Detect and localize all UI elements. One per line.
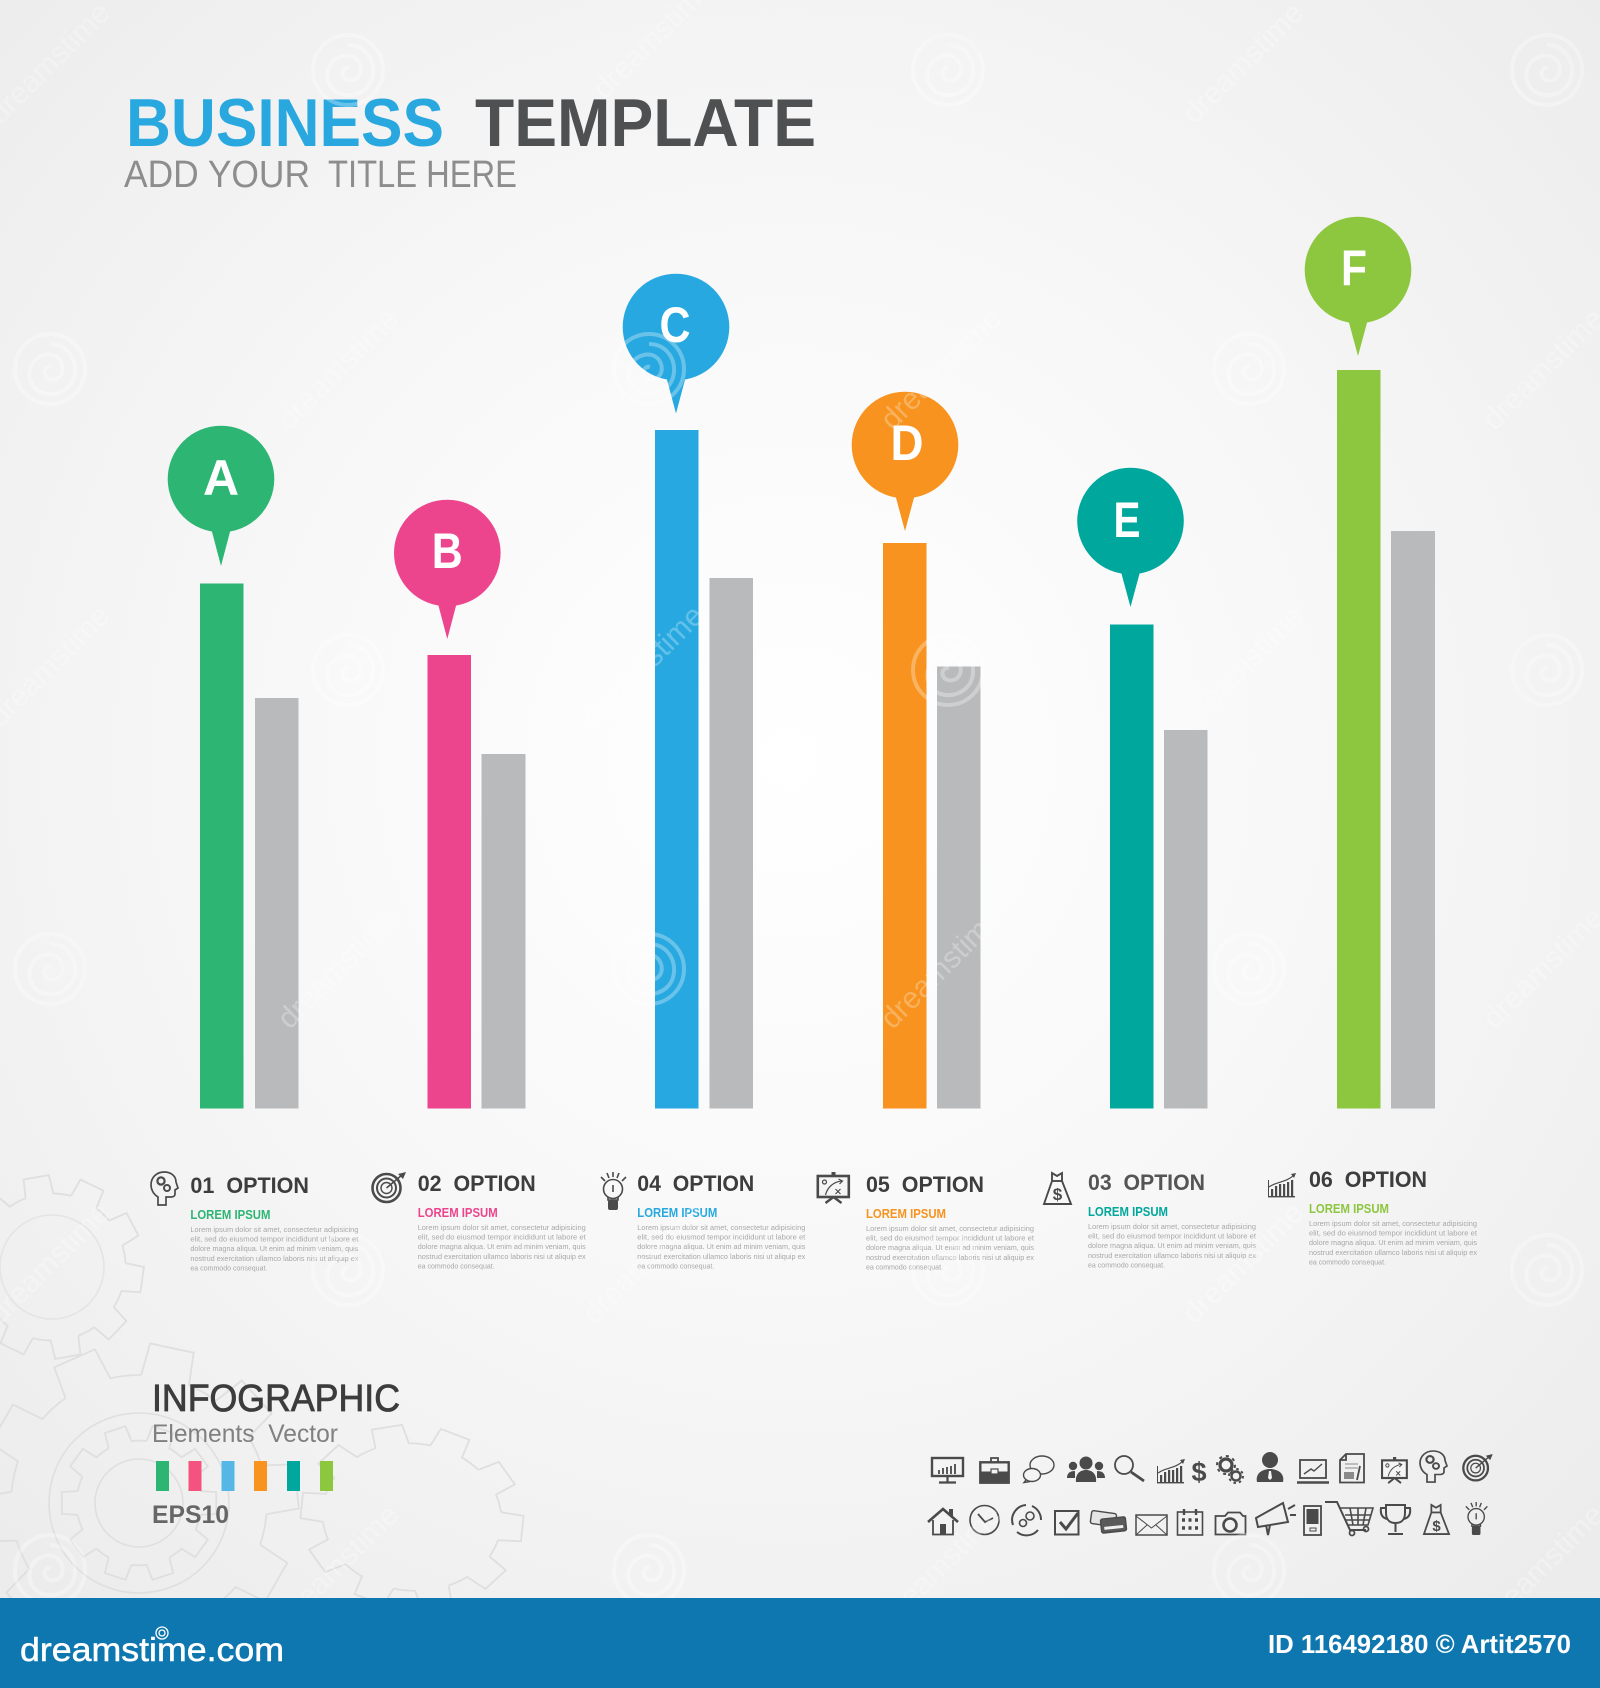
icon: camera: [1216, 1512, 1246, 1534]
option 03 text: dolore magna aliqua. Ut enim ad minim veniam, quis: [1088, 1241, 1256, 1250]
option 02 text: LOREM IPSUM: [418, 1205, 498, 1220]
option 04 text: elit, sed do eiusmod tempor incididunt ut labore et: [637, 1233, 806, 1242]
icon: light bulb: [1466, 1502, 1487, 1535]
icon: light bulb: [601, 1172, 626, 1210]
option 06 text: LOREM IPSUM: [1309, 1201, 1389, 1216]
panel: option 06: [1268, 1167, 1478, 1266]
panel: infographic label: [152, 1378, 400, 1529]
icon: trophy: [1381, 1505, 1410, 1534]
panel: option 05: [818, 1172, 1035, 1271]
icon: head: [1420, 1451, 1447, 1482]
panel: option 02: [372, 1171, 587, 1270]
option 03 text: Lorem ipsum dolor sit amet, consectetur adipisicing: [1088, 1222, 1256, 1231]
option 04 text: ea commodo consequat.: [637, 1261, 714, 1270]
icon: envelope: [1136, 1515, 1167, 1535]
option 06 text: Lorem ipsum dolor sit amet, consectetur adipisicing: [1309, 1219, 1477, 1228]
bar group C: C: [660, 297, 690, 353]
bar group D: [852, 392, 980, 1108]
text: dreamstime: [271, 1498, 405, 1632]
icon: magnifier: [1115, 1456, 1144, 1481]
icon: board: [1382, 1457, 1407, 1483]
option 06 text: elit, sed do eiusmod tempor incididunt ut labore et: [1309, 1229, 1478, 1238]
icon: shopping cart: [1325, 1502, 1373, 1536]
option 06 text: nostrud exercitation ullamco laboris nisi ut aliquip ex: [1309, 1248, 1477, 1257]
option 04 text: Lorem ipsum dolor sit amet, consectetur adipisicing: [637, 1223, 805, 1232]
option 02 text: ea commodo consequat.: [418, 1261, 495, 1270]
option 03 text: 03 OPTION: [1088, 1170, 1205, 1195]
option 05 text: LOREM IPSUM: [866, 1206, 946, 1221]
icon: person: [1257, 1452, 1283, 1482]
option 05 text: Lorem ipsum dolor sit amet, consectetur adipisicing: [866, 1224, 1034, 1233]
option 05 text: ea commodo consequat.: [866, 1262, 943, 1271]
icon: presentation board: [818, 1172, 849, 1203]
icon: megaphone: [1256, 1503, 1296, 1535]
title: [126, 85, 816, 161]
text: eps10: EPS10: [152, 1501, 229, 1529]
footer image id: ID 116492180 © Artit2570: [1268, 1629, 1571, 1659]
option 01 text: dolore magna aliqua. Ut enim ad minim veniam, quis: [190, 1244, 359, 1253]
option 05 text: [866, 1172, 1035, 1271]
icon: calendar: [1178, 1509, 1202, 1535]
option 05 text: dolore magna aliqua. Ut enim ad minim veniam, quis: [866, 1243, 1034, 1252]
panel: option 04: [601, 1171, 806, 1270]
bar group A: [168, 426, 298, 1108]
icon: gears: [1217, 1456, 1243, 1483]
colour swatches: [156, 1461, 333, 1491]
option 04 text: LOREM IPSUM: [637, 1205, 717, 1220]
subtitle: ADD YOUR: [124, 154, 310, 196]
option 06 text: ea commodo consequat.: [1309, 1257, 1386, 1266]
heading: infographic: INFOGRAPHIC: [152, 1378, 400, 1420]
bar chart: [168, 217, 1435, 1108]
option 05 text: elit, sed do eiusmod tempor incididunt ut labore et: [866, 1234, 1035, 1243]
option 02 text: dolore magna aliqua. Ut enim ad minim veniam, quis: [418, 1242, 586, 1251]
option 05 text: nostrud exercitation ullamco laboris nisi ut aliquip ex: [866, 1253, 1034, 1262]
icon: monitor: [932, 1458, 963, 1482]
text: dreamstime: [874, 1498, 1008, 1632]
footer bar: [0, 1598, 1600, 1688]
icon set: [928, 1451, 1493, 1536]
icon: money bag: [1044, 1173, 1071, 1204]
subtitle: [124, 154, 517, 196]
option 01 text: [190, 1173, 359, 1272]
icon: dollar: $: [1191, 1457, 1207, 1487]
footer logo: dreamstime.com: [20, 1631, 284, 1668]
icon: cycle gears: [1012, 1505, 1041, 1535]
icon: credit cards: [1090, 1510, 1127, 1533]
option 04 text: nostrud exercitation ullamco laboris nisi ut aliquip ex: [637, 1252, 805, 1261]
option 01 text: elit, sed do eiusmod tempor incididunt ut labore et: [190, 1235, 359, 1244]
option 01 text: nostrud exercitation ullamco laboris nisi ut aliquip ex: [190, 1254, 359, 1263]
option 05 text: 05 OPTION: [866, 1172, 984, 1197]
icon: line chart: [1157, 1459, 1185, 1483]
option 01 text: Lorem ipsum dolor sit amet, consectetur adipisicing: [190, 1225, 358, 1234]
option 01 text: 01 OPTION: [190, 1173, 309, 1198]
panel: option 03: [1044, 1170, 1257, 1269]
bar group C: [623, 274, 753, 1108]
option 03 text: LOREM IPSUM: [1088, 1204, 1168, 1219]
bar group B: [394, 500, 526, 1108]
option 06 text: dolore magna aliqua. Ut enim ad minim veniam, quis: [1309, 1238, 1477, 1247]
text: dreamstime: [874, 302, 1008, 436]
title: TEMPLATE: [475, 85, 816, 161]
bar group E: E: [1114, 492, 1140, 548]
icon: money bag: $: [1432, 1518, 1441, 1535]
icon: phone: [1304, 1506, 1321, 1535]
text: dreamstime: [576, 599, 710, 733]
option 02 text: [418, 1171, 587, 1270]
text: dreamstime: [874, 901, 1008, 1035]
text: elements vector: Elements Vector: [152, 1420, 338, 1448]
text: dreamstime: [271, 901, 405, 1035]
option 04 text: 04 OPTION: [637, 1171, 754, 1196]
icon: target: [372, 1172, 406, 1202]
bar group F: [1305, 217, 1435, 1108]
text: dreamstime: [1176, 0, 1310, 130]
option 03 text: [1088, 1170, 1257, 1269]
option 01 text: LOREM IPSUM: [190, 1207, 270, 1222]
icon: target: [1463, 1454, 1493, 1480]
option 06 text: 06 OPTION: [1309, 1167, 1427, 1192]
bar group B: B: [432, 523, 463, 579]
text: dreamstime: [1176, 1196, 1310, 1330]
icon: money bag: $: [1053, 1185, 1063, 1204]
option 03 text: nostrud exercitation ullamco laboris nisi ut aliquip ex: [1088, 1251, 1256, 1260]
text: dreamstime: [576, 1196, 710, 1330]
bar group E: [1077, 468, 1208, 1108]
subtitle: TITLE HERE: [328, 154, 517, 196]
icon: laptop: [1297, 1460, 1329, 1482]
option 02 text: Lorem ipsum dolor sit amet, consectetur adipisicing: [418, 1223, 586, 1232]
option 04 text: dolore magna aliqua. Ut enim ad minim veniam, quis: [637, 1242, 805, 1251]
option 03 text: ea commodo consequat.: [1088, 1260, 1165, 1269]
option 02 text: nostrud exercitation ullamco laboris nisi ut aliquip ex: [418, 1252, 586, 1261]
icon: briefcase: [980, 1458, 1009, 1483]
icon: head with gears: [151, 1172, 178, 1205]
icon: clock: [970, 1506, 999, 1534]
icon: growth chart: [1268, 1173, 1296, 1197]
icon: house: [928, 1509, 958, 1534]
bar group F: F: [1341, 240, 1367, 296]
bar group D: D: [890, 415, 924, 471]
icon: checkbox: [1055, 1511, 1078, 1534]
option 01 text: ea commodo consequat.: [190, 1263, 267, 1272]
option 04 text: [637, 1171, 806, 1270]
icon: chat bubbles: [1024, 1456, 1054, 1482]
icon: people: [1067, 1456, 1105, 1482]
icon: document: [1340, 1454, 1364, 1482]
title: BUSINESS: [126, 85, 444, 161]
panel: option 01: [151, 1172, 359, 1272]
option 02 text: 02 OPTION: [418, 1171, 536, 1196]
option 02 text: elit, sed do eiusmod tempor incididunt ut labore et: [418, 1233, 587, 1242]
option 06 text: [1309, 1167, 1478, 1266]
text: dreamstime: [271, 302, 405, 436]
icon: money bag: [1424, 1505, 1449, 1535]
option 03 text: elit, sed do eiusmod tempor incididunt ut labore et: [1088, 1232, 1257, 1241]
bar group A: A: [203, 450, 239, 506]
text: dreamstime: [1176, 599, 1310, 733]
